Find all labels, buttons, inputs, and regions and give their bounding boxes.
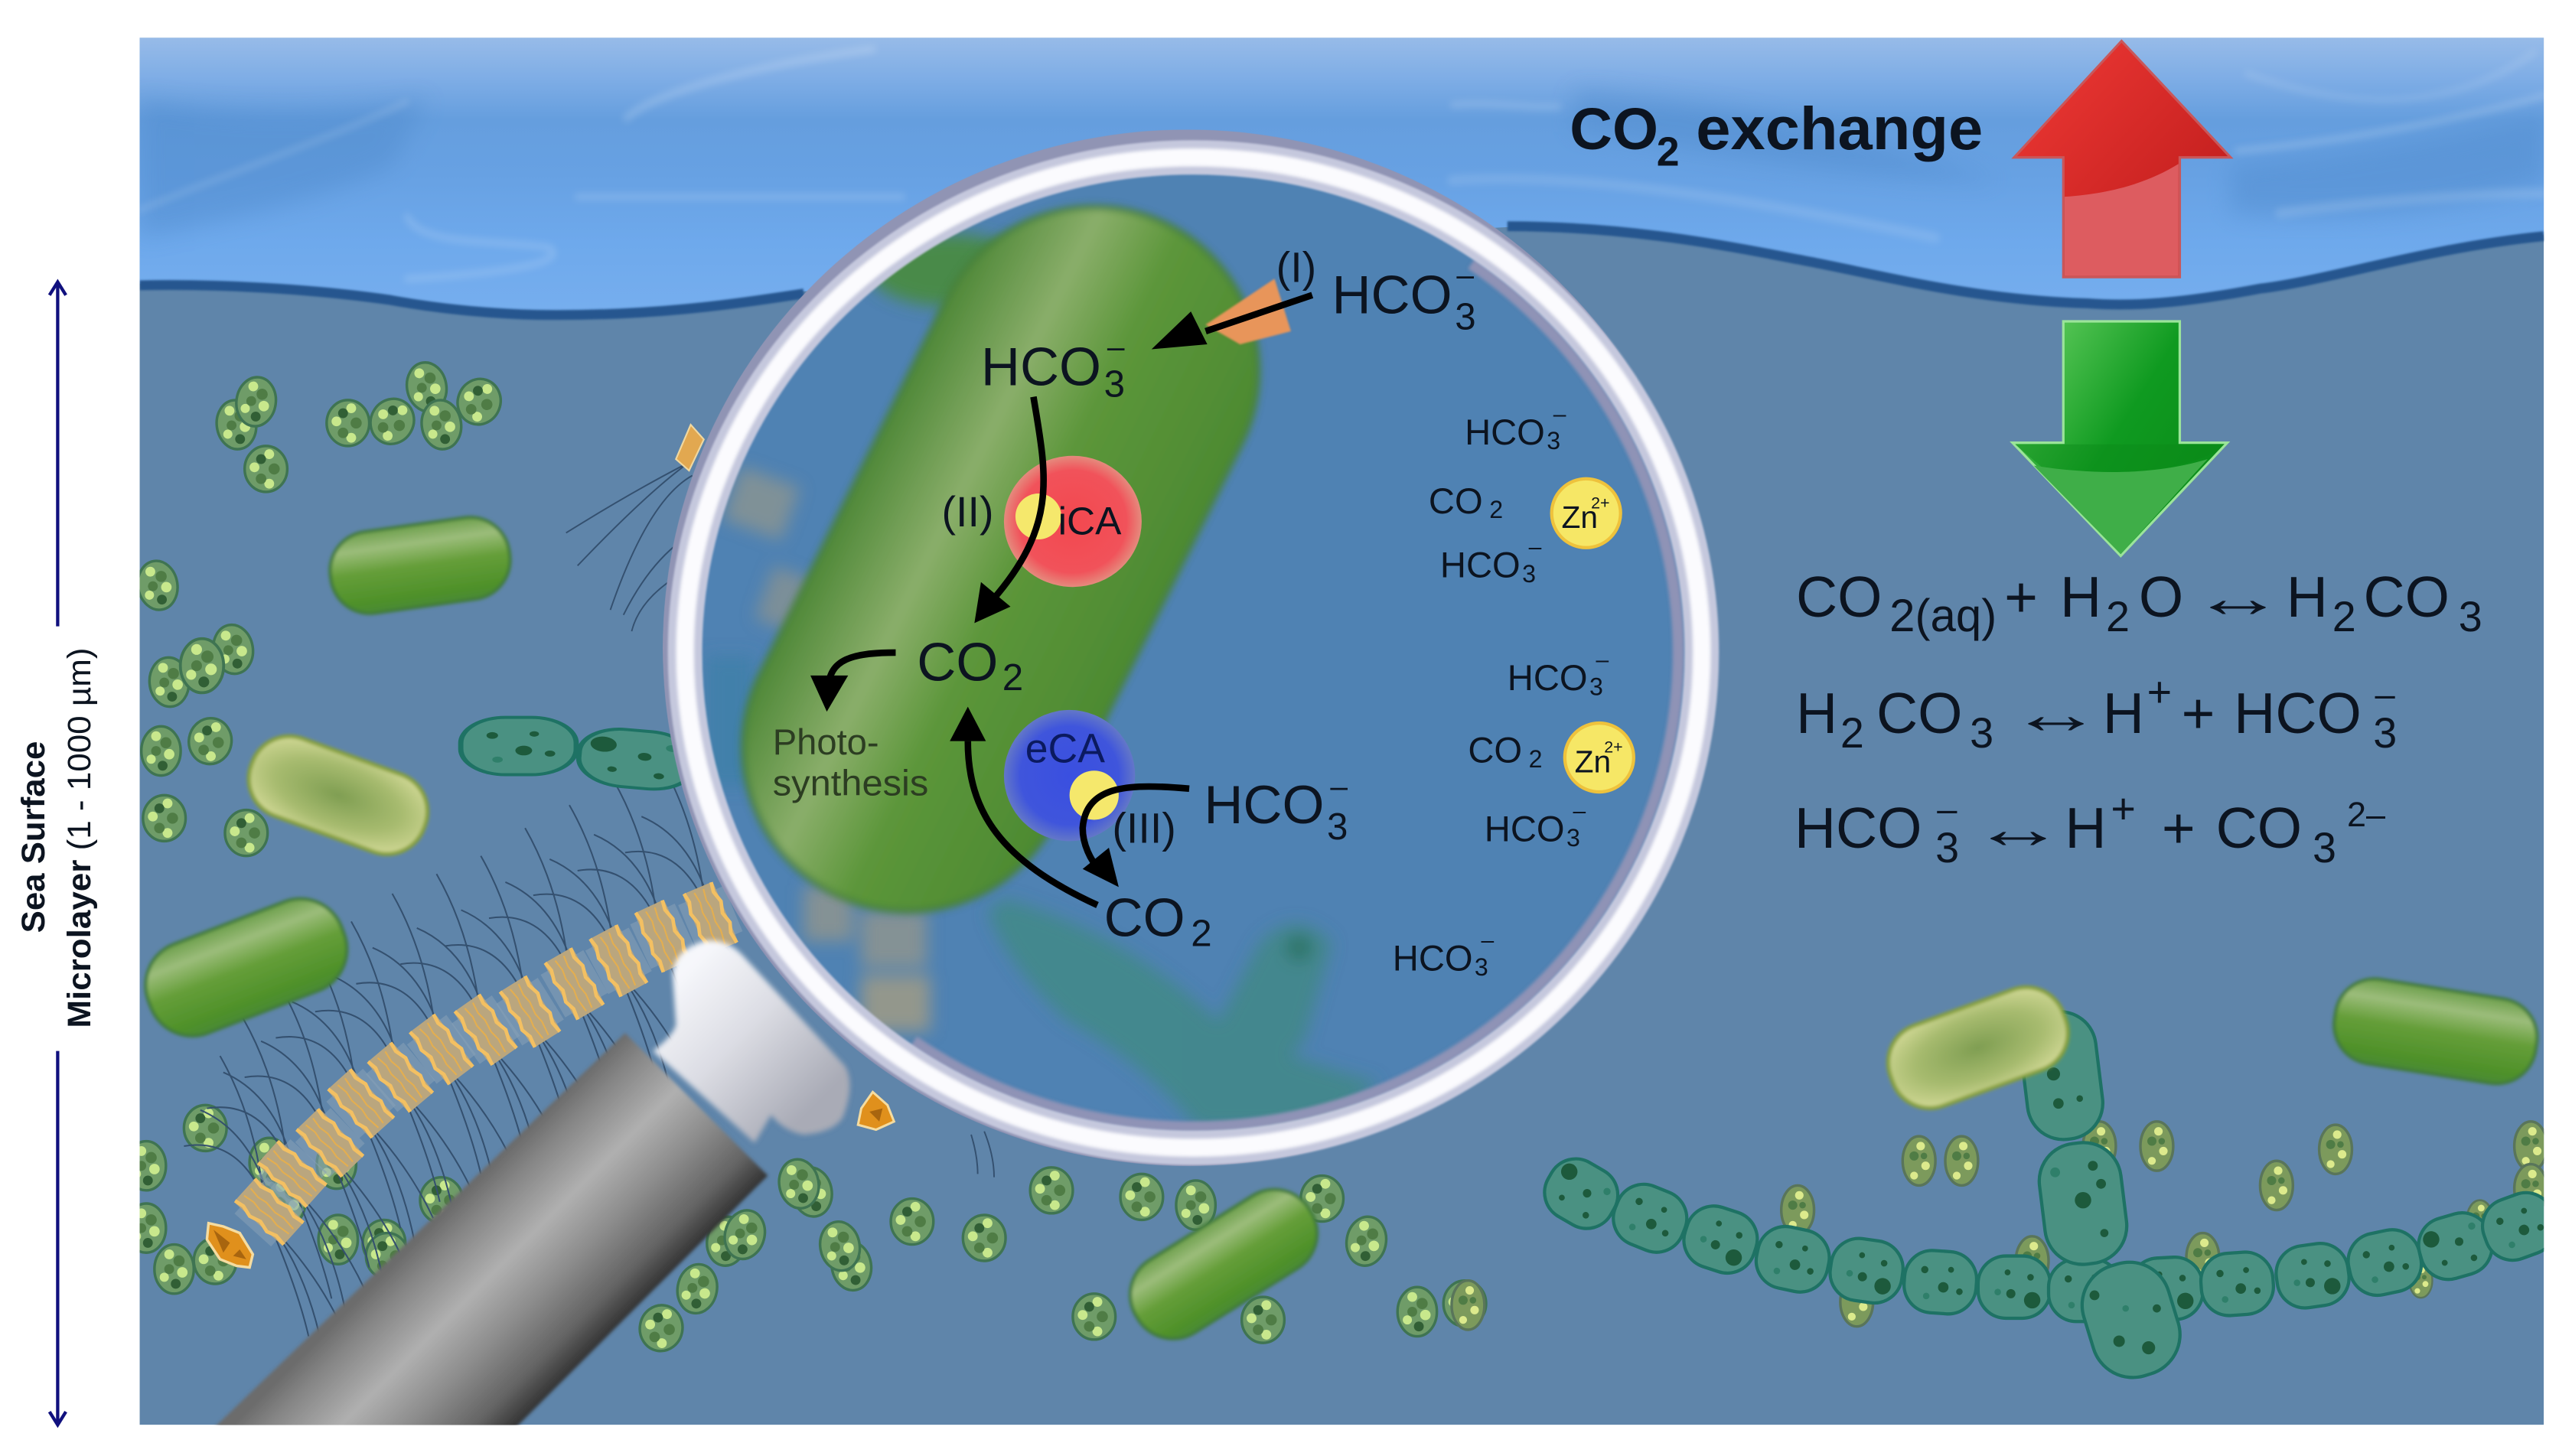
equation 1: CO [2363,565,2450,629]
label: CO2 outside cell: CO [1104,888,1185,948]
equation 3 [1795,785,2385,871]
bacillus: green right [2329,973,2543,1090]
free ion: HCO3- lower [1393,928,1495,981]
eCA enzyme: eCA [1025,727,1105,772]
diatom orange single cell [858,1092,894,1130]
transporter [1205,278,1291,344]
equation 3: – [1937,789,1958,829]
free ions group 2: 3 [1566,824,1580,852]
equation 2: 3 [2373,709,2397,757]
lens inner shading [914,264,1678,1127]
large bacterium cell [687,151,1314,967]
label: CO2 inside cell: 2 [1002,656,1023,699]
equation 2: H [2103,681,2144,745]
diatom chain [228,878,746,1252]
bacillus: pale left [238,725,438,865]
equation 2: ↔ [2010,683,2103,745]
diatom setae [184,462,994,1363]
free ion: HCO3- lower: HCO [1393,938,1473,979]
free ions group 1: CO [1429,480,1483,521]
label: (II): (II) [941,488,994,536]
equation 1 [1796,565,2482,641]
free ions group 2: HCO [1485,808,1565,849]
equation 1: + [2004,565,2038,629]
label: (III): (III) [1112,805,1176,852]
free ions group 1: 3 [1522,560,1536,588]
air above sea surface [140,37,2544,313]
teal filament branch [2016,1008,2190,1388]
zinc ion 2: Zn [1575,744,1611,779]
scale arrow up [50,282,66,627]
zinc ion 2 [1565,723,1634,792]
arrow to photosynthesis [810,653,895,712]
arrow: CO2 outgassing red [2014,41,2231,277]
scale label: Microlayer (1 - 1000 µm) [61,647,98,1028]
free ions group 1: HCO [1440,544,1521,585]
equation 2: + [2147,669,2172,716]
lens interior water [699,172,1686,1133]
arrow: CO2 uptake green [2013,321,2228,555]
arrow I [1152,295,1312,349]
label: HCO3- outside transporter: 3 [1455,296,1476,338]
magnifier collar [653,940,849,1143]
magnifying lens glass [663,129,1713,1166]
teal cells left [461,718,696,793]
iCA enzyme: iCA [1058,499,1122,543]
equation 3: ↔ [1971,798,2065,860]
equation 3: HCO [1795,796,1922,860]
label: HCO3- inside cell: HCO [981,337,1101,397]
label: Photosynthesis: Photo- [773,721,879,762]
equation 1: H [2287,565,2328,629]
lens ring [685,158,1702,1148]
equation 3: 3 [1935,824,1959,871]
equation 3: 2– [2347,795,2385,834]
label: HCO3- outside eCA: 3 [1327,806,1348,848]
label: Photosynthesis: synthesis [773,762,928,803]
free ions group 2: – [1573,798,1586,823]
scale label [15,647,98,1028]
equation 1: CO [1796,565,1882,629]
arrow III uptake [950,707,1097,905]
iCA enzyme [1004,456,1142,587]
heading: CO2 exchange [1570,94,1983,174]
free ions group 2: 3 [1589,673,1603,701]
label: HCO3- outside eCA: HCO [1204,774,1324,835]
free ions group 2: – [1596,647,1609,673]
equation 1: H [2060,565,2101,629]
free ions group 2: 2 [1529,745,1543,773]
free ions group 1 [1429,402,1566,588]
free ions group 1: – [1529,534,1542,559]
bacillus: green bottom [1115,1174,1332,1354]
coccoid cells: centre bottom [636,1156,1486,1354]
free ions group 1: HCO [1465,412,1545,452]
label: HCO3- inside cell: 3 [1104,363,1125,406]
coccoid cells: right side [1452,1122,2547,1330]
teal filament [1534,1148,2564,1322]
label: HCO3- inside cell [981,329,1125,406]
free ions group 2: HCO [1508,657,1588,698]
sea surface line [140,226,2544,315]
diatom cell at upper left of lens [676,425,704,471]
equation 1: ↔ [2191,567,2285,629]
label: Photosynthesis [773,721,928,803]
coccoid cells: left edge [126,558,463,1294]
equation 2 [1796,669,2397,757]
heading: CO2 exchange: 2 [1657,129,1680,174]
label: HCO3- outside transporter: – [1456,257,1474,292]
zinc ion 1: 2+ [1591,493,1610,512]
free ions group 1: 2 [1489,496,1503,523]
scale arrow down [50,1051,66,1425]
label: HCO3- outside transporter: HCO [1332,264,1452,324]
free ions group 1: – [1553,402,1566,427]
equation 2: HCO [2234,681,2362,745]
heading: CO2 exchange: CO [1570,96,1658,162]
equation 3: + [2162,796,2195,860]
equation 2: – [2375,674,2395,715]
blurred magnified background [706,234,1378,1128]
label: HCO3- outside eCA [1204,769,1348,848]
equation 1: 3 [2459,593,2482,640]
coccoid cells: upper left cluster [214,360,507,492]
bacillus: pale right [1877,976,2079,1119]
heading: CO2 exchange: exchange [1696,94,1983,162]
equation 2: 2 [1840,709,1864,757]
equation 3: CO [2216,796,2302,860]
free ions group 2: CO [1468,730,1522,770]
label: CO2 inside cell [917,631,1023,699]
equation 2: + [2182,681,2215,745]
equation 2: H [1796,681,1837,745]
label: CO2 outside cell [1104,888,1212,955]
magnifier handle [212,1033,768,1430]
equation 1: 2(aq) [1889,590,1997,641]
zinc ion 1 [1552,479,1621,548]
arrow II [974,397,1044,623]
eCA enzyme [1004,710,1135,841]
label: CO2 inside cell: CO [917,631,998,692]
zinc ion 1: Zn [1562,500,1598,535]
equation 2: 3 [1970,709,1993,757]
label: HCO3- outside eCA: – [1330,769,1348,804]
sky soft darker bands [140,90,2544,238]
arrow eCA conversion [1083,787,1189,887]
equation 3: 3 [2313,824,2336,871]
label: HCO3- outside transporter [1332,257,1476,338]
lens outer rim [663,129,1713,1166]
label: CO2 outside cell: 2 [1191,913,1212,955]
label: (I): (I) [1276,244,1316,292]
equation 1: 2 [2332,593,2356,640]
bacillus: green upper left [325,513,515,619]
free ions group 2 [1468,647,1609,852]
equation 1: O [2139,565,2183,629]
free ions group 1: 3 [1547,427,1560,454]
label: HCO3- inside cell: – [1107,329,1125,364]
bacillus: green left [133,886,360,1049]
equation 1: 2 [2106,593,2130,640]
sky streaks [140,49,2545,278]
scale label: Sea Surface [15,741,52,933]
free ion: HCO3- lower: 3 [1475,953,1488,981]
equation 3: + [2111,785,2136,832]
equation 3: H [2065,796,2107,860]
equation 2: CO [1876,681,1962,745]
free ion: HCO3- lower: – [1482,928,1495,953]
diatom orange end cell [207,1223,253,1268]
zinc ion 2: 2+ [1604,738,1623,757]
